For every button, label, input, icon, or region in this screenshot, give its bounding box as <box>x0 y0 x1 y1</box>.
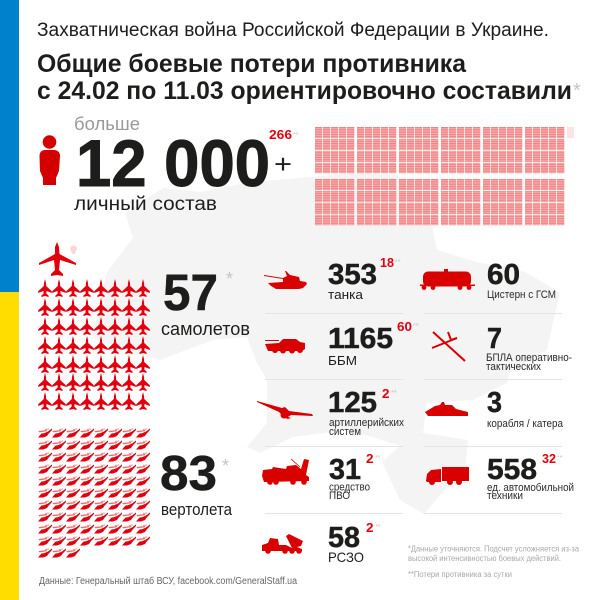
artillery figure: 125 <box>328 387 377 419</box>
ships figure <box>487 387 564 430</box>
tanks figure: 353 <box>328 259 377 291</box>
subtitle: Захватническая война Российской Федерации в Украине. <box>37 20 549 41</box>
title: Общие боевые потери противника <box>37 50 467 78</box>
icon: fuel tanker <box>420 269 475 290</box>
armoured vehicles figure: ** <box>413 323 419 330</box>
icon: ship <box>425 402 468 416</box>
footnotes <box>408 544 580 579</box>
row dividers <box>265 313 562 514</box>
helicopter figure <box>160 447 232 519</box>
air defence figure: средство <box>329 482 370 494</box>
air defence figure: 2 <box>366 451 374 466</box>
armoured vehicles figure: 60 <box>397 319 412 334</box>
artillery figure <box>328 386 404 438</box>
drones figure <box>486 323 572 373</box>
rocket launchers figure: 2 <box>366 520 374 535</box>
personnel figure: ** <box>293 132 299 139</box>
armoured vehicles figure: ББМ <box>328 353 357 368</box>
artillery figure: 2 <box>382 386 390 401</box>
title <box>37 50 581 105</box>
vehicles figure: техники <box>487 490 523 502</box>
rocket launchers figure: РСЗО <box>328 549 364 565</box>
vehicles figure <box>487 451 574 502</box>
rocket launchers figure: 58 <box>328 522 360 554</box>
vehicles figure: 558 <box>487 454 537 486</box>
helicopter figure: 83 <box>160 447 217 501</box>
tanks figure: танка <box>328 287 364 302</box>
aircraft figure: 57 <box>163 264 218 321</box>
icon: artillery <box>257 401 313 419</box>
ships figure: 3 <box>487 387 502 419</box>
fuel tankers figure <box>487 259 556 301</box>
vehicles figure: 32 <box>542 451 556 466</box>
vehicles figure: ** <box>557 455 563 462</box>
aircraft figure <box>161 264 250 339</box>
personnel figure: 266 <box>269 127 292 142</box>
aircraft figure: самолетов <box>161 319 250 339</box>
rocket launchers figure <box>328 520 381 565</box>
artillery figure: артиллерийских <box>329 417 404 429</box>
map of Ukraine <box>92 173 560 514</box>
footnotes: **Потери противника за сутки <box>408 570 512 579</box>
aircraft pictogram grid <box>38 279 150 410</box>
icon: rocket launcher <box>262 534 303 554</box>
flag stripe <box>0 0 19 600</box>
vehicles figure: ед. автомобильной <box>487 482 574 494</box>
helicopter pictogram grid <box>38 428 150 558</box>
aircraft figure: * <box>226 269 233 289</box>
footnotes: *Данные уточняются. Подсчет усложняется из-за <box>408 544 580 554</box>
title: * <box>573 80 581 102</box>
drones figure: тактических <box>486 361 541 373</box>
artillery figure: систем <box>329 426 361 438</box>
personnel figure: + <box>274 149 292 179</box>
ships figure: корабля / катера <box>487 418 564 430</box>
helicopter figure: * <box>222 456 229 476</box>
icon: air defence vehicle <box>262 459 309 485</box>
tanks figure: ** <box>395 259 401 266</box>
rocket launchers figure: ** <box>375 524 381 531</box>
footnotes: высокой интенсивностью боевых действий. <box>408 554 561 563</box>
source: Данные: Генеральный штаб ВСУ, facebook.com/GeneralStaff.ua <box>39 575 297 587</box>
personnel figure: 12 000 <box>76 126 270 200</box>
air defence figure: 31 <box>329 454 361 486</box>
title: с 24.02 по 11.03 ориентировочно составили <box>37 77 572 105</box>
armoured vehicles figure: 1165 <box>328 323 393 355</box>
air defence figure: ** <box>375 455 381 462</box>
helicopter figure: вертолета <box>161 500 232 519</box>
personnel figure <box>74 114 299 215</box>
drones figure: 7 <box>487 323 502 355</box>
personnel figure: личный состав <box>74 194 217 215</box>
fuel tankers figure: 60 <box>487 259 520 291</box>
air defence figure <box>329 451 381 502</box>
air defence figure: ПВО <box>329 490 350 502</box>
icon: tank <box>264 271 307 289</box>
icon: armoured vehicle <box>265 339 305 354</box>
icon: transport plane <box>39 242 76 276</box>
tanks figure: 18 <box>380 255 394 270</box>
personnel pictogram grid <box>315 127 574 225</box>
fuel tankers figure: Цистерн с ГСМ <box>487 289 556 301</box>
icon: drone <box>432 332 465 361</box>
drones figure: БПЛА оперативно- <box>486 352 572 364</box>
personnel figure: больше <box>74 114 140 134</box>
icon: soldier <box>40 135 60 185</box>
armoured vehicles figure <box>328 319 419 368</box>
artillery figure: ** <box>391 390 397 397</box>
icon: parachute <box>70 246 77 254</box>
icon: truck <box>426 467 469 485</box>
tanks figure <box>328 255 401 302</box>
